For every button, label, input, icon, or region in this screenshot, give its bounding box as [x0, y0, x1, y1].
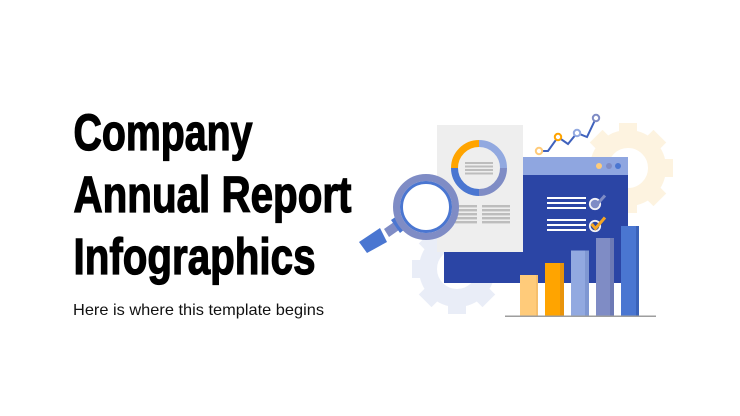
donut chart [454, 144, 504, 192]
handle [359, 216, 405, 253]
report text lines [455, 205, 510, 223]
icon: blue gear [412, 224, 502, 314]
title: Company [74, 104, 253, 161]
lens [403, 184, 449, 230]
bar chart [505, 226, 656, 317]
magnifying glass [359, 178, 456, 253]
icon: yellow gear [583, 123, 673, 213]
subtitle: Here is where this template begins [73, 302, 324, 319]
title [74, 104, 352, 285]
title: Infographics [74, 228, 316, 285]
line chart [536, 115, 599, 154]
donut label lines [465, 162, 493, 174]
panel: browser window [444, 157, 628, 283]
panel: report page [437, 125, 523, 252]
checklist item two [547, 218, 605, 231]
title: Annual Report [74, 166, 352, 223]
checklist item one [547, 196, 605, 209]
